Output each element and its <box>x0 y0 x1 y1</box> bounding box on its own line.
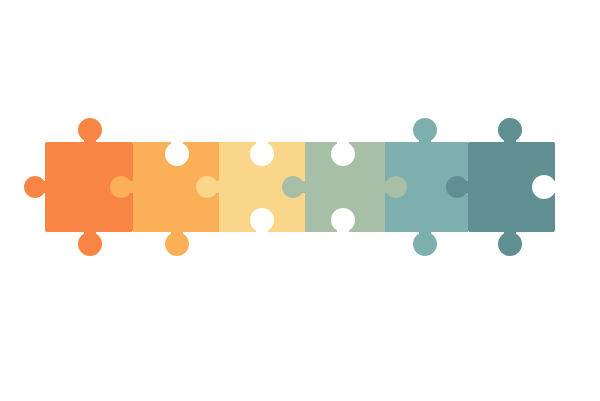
holes <box>165 140 558 234</box>
piece 5: teal <box>385 118 468 256</box>
piece 4: sage green <box>282 142 407 232</box>
piece 1: orange <box>24 118 133 256</box>
piece 3: yellow <box>196 142 305 232</box>
piece 6: dark teal <box>446 118 555 256</box>
piece 2: light orange <box>110 142 219 256</box>
